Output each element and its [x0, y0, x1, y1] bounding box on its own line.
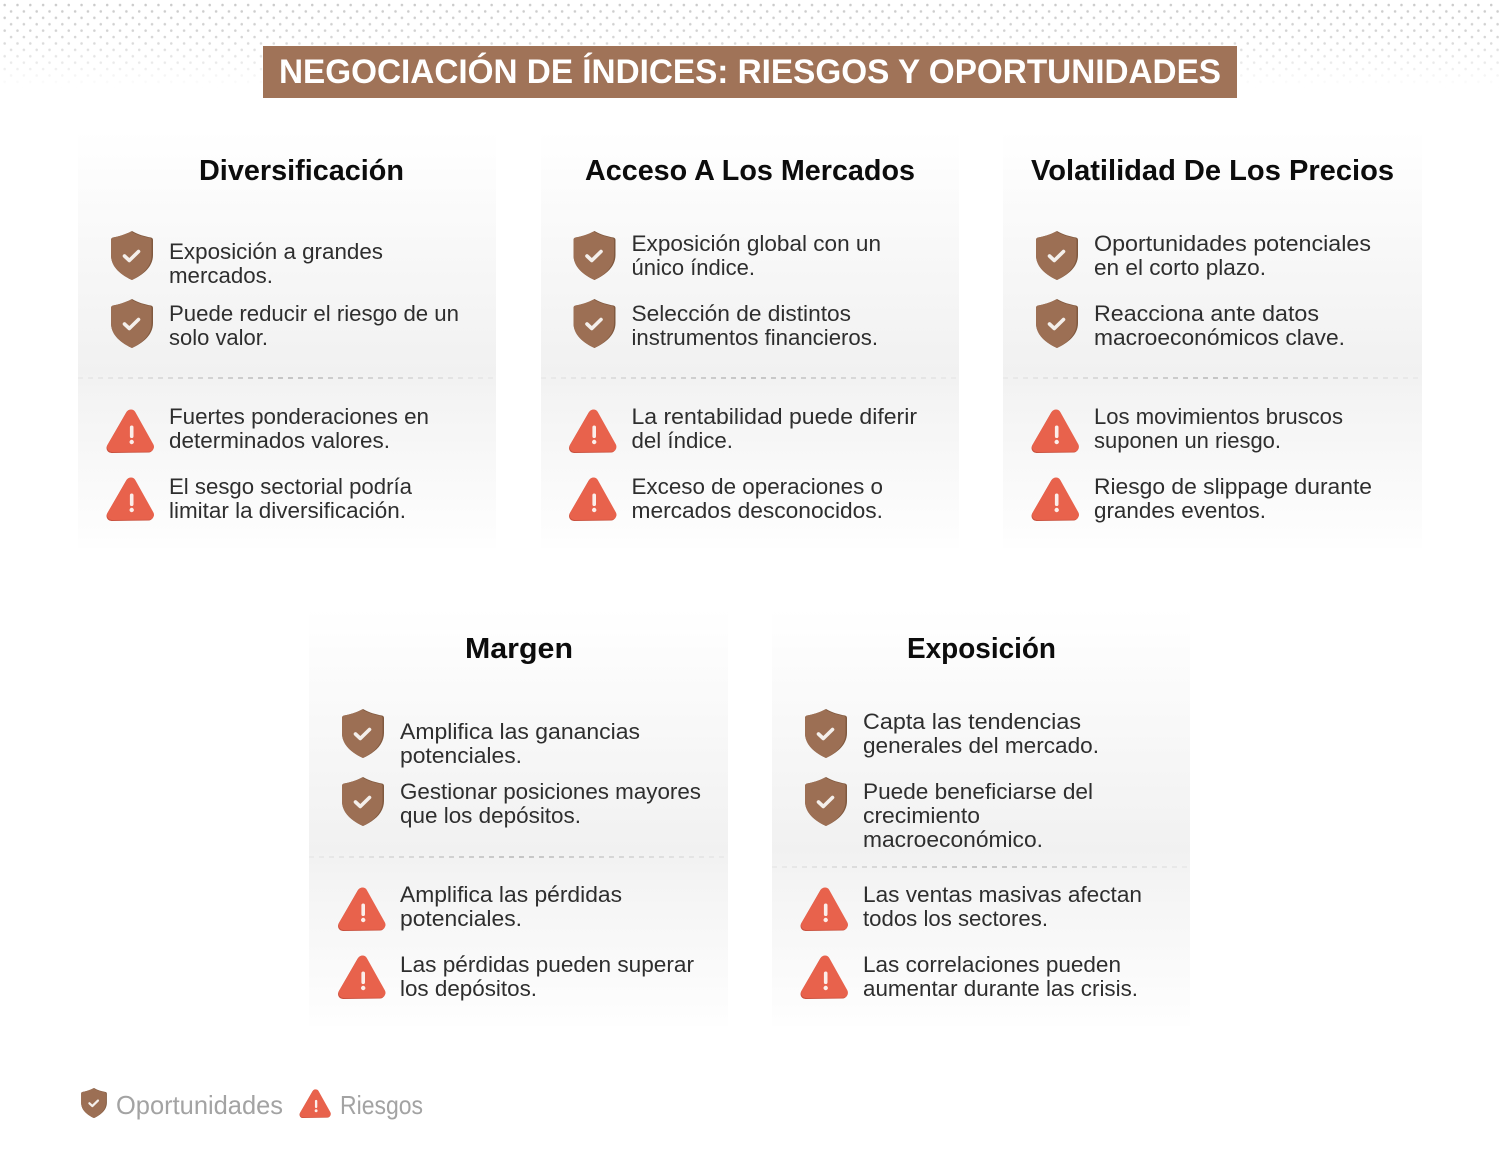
- panel: Exposición: [772, 608, 1190, 1026]
- risk item 2: Riesgo de slippage durante: [1094, 474, 1372, 499]
- opportunity item 2: Selección de distintos: [632, 301, 851, 326]
- risk item 2: grandes eventos.: [1094, 498, 1266, 523]
- risk item 2: [1036, 474, 1372, 523]
- risk item 1: Los movimientos bruscos: [1094, 404, 1343, 429]
- opportunity item 1: Capta las tendencias: [863, 709, 1081, 734]
- risk item 2: [112, 474, 413, 523]
- risk item 1: [343, 882, 622, 931]
- opportunity item 2: [1036, 299, 1345, 350]
- opportunity item 2: [111, 299, 459, 350]
- opportunity item 2: macroeconómico.: [863, 827, 1043, 852]
- opportunity item 2: instrumentos financieros.: [632, 325, 878, 350]
- panel: Volatilidad De Los Precios: [1003, 130, 1422, 548]
- opportunity item 2: crecimiento: [863, 803, 980, 828]
- background dot pattern: [3, 4, 1499, 76]
- risk item 2: El sesgo sectorial podría: [169, 474, 413, 499]
- opportunity item 1: Amplifica las ganancias: [400, 719, 640, 744]
- opportunity item 2: [805, 777, 1093, 852]
- risk item 1: [806, 882, 1142, 931]
- opportunity item 2: solo valor.: [169, 325, 268, 350]
- opportunity item 1: [805, 709, 1099, 758]
- risk item 1: suponen un riesgo.: [1094, 428, 1281, 453]
- risk item 2: aumentar durante las crisis.: [863, 976, 1138, 1001]
- opportunity item 1: generales del mercado.: [863, 733, 1099, 758]
- panel: Acceso A Los Mercados: [541, 130, 959, 548]
- heading: Exposición: Exposición: [907, 633, 1056, 665]
- opportunity item 2: [574, 299, 878, 350]
- risk item 2: [343, 952, 694, 1001]
- risk item 2: limitar la diversificación.: [169, 498, 406, 523]
- risk item 1: Amplifica las pérdidas: [400, 882, 622, 907]
- risk item 1: [112, 404, 429, 453]
- risk item 1: La rentabilidad puede diferir: [632, 404, 917, 429]
- opportunity item 1: Exposición a grandes: [169, 239, 383, 264]
- heading: Margen: Margen: [465, 633, 573, 665]
- opportunity item 2: [342, 777, 701, 828]
- risk item 2: [574, 474, 883, 523]
- risk item 1: determinados valores.: [169, 428, 390, 453]
- legend: [81, 1088, 423, 1120]
- risk item 1: [1036, 404, 1343, 453]
- opportunity item 1: Oportunidades potenciales: [1094, 231, 1371, 256]
- heading: Acceso A Los Mercados: Acceso A Los Mercados: [585, 155, 915, 187]
- risk item 2: Exceso de operaciones o: [632, 474, 883, 499]
- legend: riesgos: Riesgos: [340, 1090, 423, 1120]
- risk item 2: los depósitos.: [400, 976, 537, 1001]
- risk item 2: Las correlaciones pueden: [863, 952, 1121, 977]
- panel: Margen: [309, 608, 728, 1026]
- risk item 1: potenciales.: [400, 906, 522, 931]
- opportunity item 1: potenciales.: [400, 743, 522, 768]
- legend: oportunidades: Oportunidades: [116, 1090, 283, 1120]
- opportunity item 1: [574, 231, 881, 280]
- opportunity item 1: único índice.: [632, 255, 755, 280]
- opportunity item 1: [342, 709, 640, 768]
- risk item 1: todos los sectores.: [863, 906, 1048, 931]
- risk item 1: [574, 404, 917, 453]
- opportunity item 2: Gestionar posiciones mayores: [400, 779, 701, 804]
- opportunity item 1: mercados.: [169, 263, 273, 288]
- risk item 2: Las pérdidas pueden superar: [400, 952, 694, 977]
- opportunity item 2: Puede beneficiarse del: [863, 779, 1093, 804]
- title: NEGOCIACIÓN DE ÍNDICES: RIESGOS Y OPORTUNIDADES: [279, 53, 1221, 91]
- risk item 1: del índice.: [632, 428, 733, 453]
- risk item 2: mercados desconocidos.: [632, 498, 883, 523]
- opportunity item 2: macroeconómicos clave.: [1094, 325, 1345, 350]
- legend: riesgos: [303, 1090, 423, 1120]
- opportunity item 2: que los depósitos.: [400, 803, 581, 828]
- heading: Volatilidad De Los Precios: Volatilidad De Los Precios: [1031, 155, 1394, 187]
- heading: Diversificación: Diversificación: [199, 155, 404, 187]
- risk item 2: [806, 952, 1138, 1001]
- risk item 1: Las ventas masivas afectan: [863, 882, 1142, 907]
- panel: Diversificación: [78, 130, 496, 548]
- opportunity item 2: Puede reducir el riesgo de un: [169, 301, 459, 326]
- opportunity item 1: en el corto plazo.: [1094, 255, 1266, 280]
- opportunity item 1: Exposición global con un: [632, 231, 881, 256]
- opportunity item 1: [1036, 231, 1371, 280]
- opportunity item 1: [111, 231, 383, 288]
- risk item 1: Fuertes ponderaciones en: [169, 404, 429, 429]
- opportunity item 2: Reacciona ante datos: [1094, 301, 1319, 326]
